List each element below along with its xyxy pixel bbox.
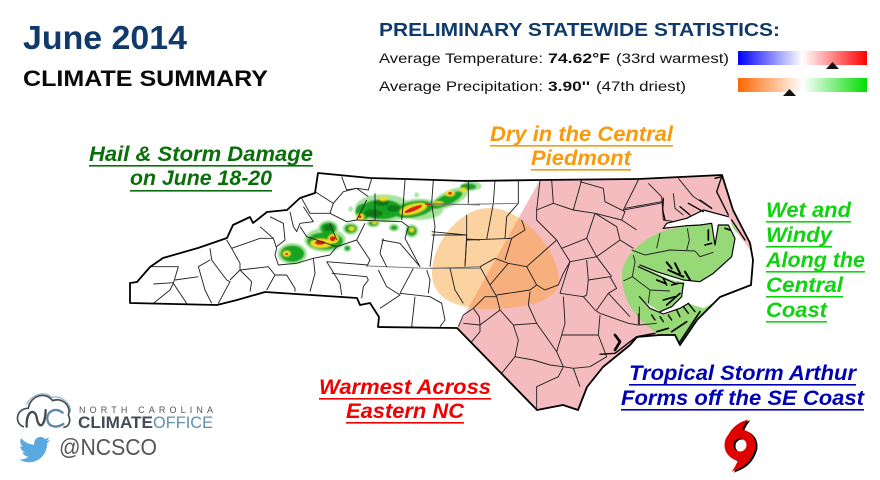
logo: North Carolina Climate Office: OFFICE [153, 413, 213, 432]
icon: cloud with NC letters [17, 394, 71, 427]
callout: tropical storm arthur [621, 362, 865, 411]
state land [130, 173, 753, 410]
callout: hail and storm damage [89, 143, 313, 192]
callout: hail and storm damage: Hail & Storm Damage [89, 143, 313, 166]
coastal sounds [640, 210, 753, 315]
statistics heading: PRELIMINARY STATEWIDE STATISTICS: [379, 20, 780, 40]
temperature statistic: (33rd warmest) [616, 50, 729, 66]
region: wet central coast [622, 218, 737, 345]
logo: North Carolina Climate Office [17, 394, 213, 432]
title [23, 19, 268, 91]
county lines: east [430, 180, 663, 408]
precipitation statistic: (47th driest) [596, 78, 686, 94]
callout: wet and windy along the central coast [765, 199, 865, 323]
icon: twitter bird [19, 437, 50, 462]
precipitation statistic: Average Precipitation: [379, 78, 543, 94]
callout: wet and windy along the central coast: Along the [765, 249, 865, 272]
precipitation rank bar [738, 78, 867, 96]
callout: dry in the central piedmont: Dry in the Central [490, 123, 674, 146]
callout: wet and windy along the central coast: Coast [766, 299, 828, 322]
jagged shoreline [600, 177, 745, 354]
region: warmest across eastern NC [457, 175, 753, 410]
precipitation statistic [379, 78, 686, 94]
callout: wet and windy along the central coast: Central [766, 274, 844, 297]
temperature statistic: Average Temperature: [379, 50, 543, 66]
twitter handle: @NCSCO [59, 434, 157, 460]
callout: warmest across eastern NC: Warmest Across [319, 376, 491, 399]
radar echoes of storm damage [278, 181, 482, 264]
callout: tropical storm arthur: Forms off the SE Coast [621, 387, 865, 410]
sounds and coastal detail [600, 177, 753, 354]
callout: dry in the central piedmont: Piedmont [531, 147, 632, 170]
precipitation statistic: 3.90'' [548, 78, 590, 94]
county lines: west [150, 177, 480, 327]
temperature statistic: 74.62°F [548, 50, 611, 66]
callout: dry in the central piedmont [490, 123, 674, 171]
state outline [130, 173, 753, 410]
callout: warmest across eastern NC: Eastern NC [346, 400, 465, 423]
callout: hail and storm damage: on June 18-20 [130, 167, 272, 190]
interior county lines of the coast [623, 178, 713, 325]
callout: warmest across eastern NC [319, 376, 491, 424]
temperature rank bar [738, 51, 867, 69]
panel: statewide statistics [379, 20, 867, 96]
logo: North Carolina Climate Office: NORTH CAROLINA [79, 405, 213, 415]
logo: North Carolina Climate Office: CLIMATE [78, 413, 153, 432]
callout: tropical storm arthur: Tropical Storm Arthur [629, 362, 858, 385]
map of North Carolina [130, 173, 753, 410]
temperature statistic [379, 50, 729, 66]
callout: wet and windy along the central coast: Wet and [766, 199, 852, 222]
callout: wet and windy along the central coast: Windy [766, 224, 833, 247]
icon: hurricane symbol [725, 419, 758, 473]
region: dry central piedmont [432, 208, 559, 309]
title: CLIMATE SUMMARY [23, 66, 268, 91]
title: June 2014 [23, 19, 188, 56]
